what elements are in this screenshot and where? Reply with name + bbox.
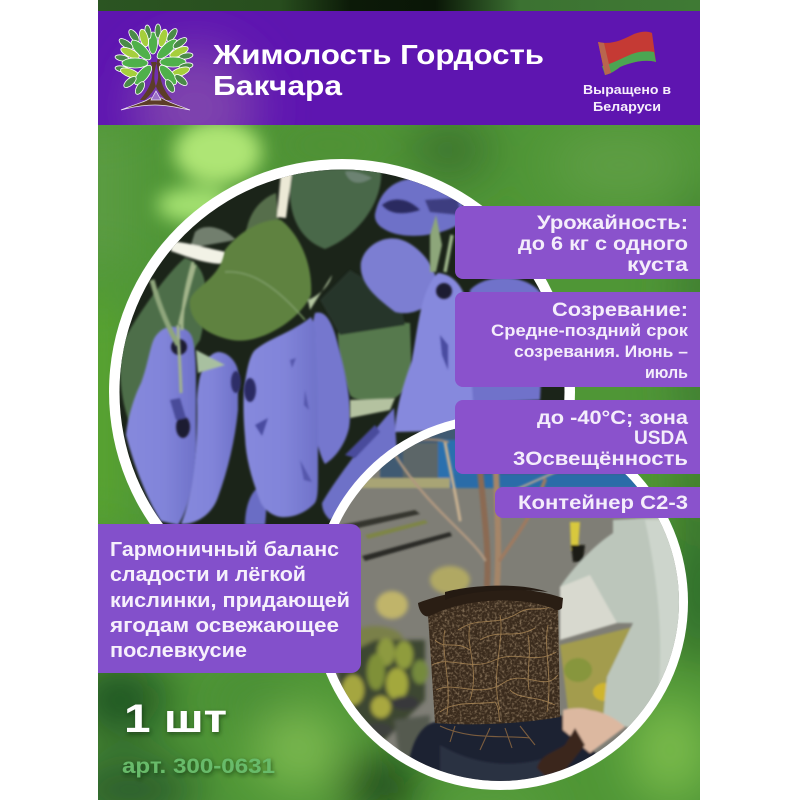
panel: taste description: Гармоничный баланс [110,539,339,561]
background: blurred green foliage [98,125,700,800]
panel: ripening: Созревание: [552,300,688,321]
panel: taste description [98,524,361,673]
title [212,39,544,101]
title: Жимолость Гордость [212,39,544,70]
panel: yield: Урожайность: [537,213,688,234]
background strip above header [98,0,700,12]
leaves behind the berries [120,168,412,435]
panel: taste description: ягодам освежающее [109,615,339,637]
title: Бакчара [213,70,342,101]
photo circle: container root ball [326,420,688,790]
panel: ripening: Средне-поздний срок [491,321,689,340]
panel: taste description: послевкусие [110,640,247,662]
panel: yield [455,206,700,279]
berries [126,178,545,525]
photo circle: honeysuckle berries [109,159,575,524]
nursery background [342,428,637,562]
panel: ripening: июль [645,363,688,382]
header band [98,11,700,125]
made-in label [583,82,671,114]
quantity: 1 шт [124,697,227,741]
article number: арт. 300-0631 [122,755,275,778]
icon: Belarus flag [598,32,656,75]
panel: ripening [455,292,700,387]
panel: yield: куста [627,255,689,276]
panel: frost hardiness: USDA [634,428,688,449]
logo: leaves [115,24,193,96]
panel: yield: до 6 кг с одного [518,234,688,255]
made-in label: Выращено в [583,82,671,97]
panel: container: Контейнер С2-3 [518,493,688,514]
panel: frost hardiness: 3Освещённость [513,449,688,470]
logo: tree [115,24,193,110]
made-in label: Беларуси [593,99,661,114]
front leaf and stems [152,215,452,418]
root-ball container [418,586,565,750]
panel: taste description: сладости и лёгкой [110,564,306,586]
panel: frost hardiness: до -40°С; зона [537,408,688,429]
plant stems [395,440,560,585]
panel: container [495,487,700,518]
panel: ripening: созревания. Июнь – [514,342,688,361]
berry bloom specks [170,198,460,482]
panel: taste description: кислинки, придающей [110,590,350,612]
panel: frost hardiness [455,400,700,474]
